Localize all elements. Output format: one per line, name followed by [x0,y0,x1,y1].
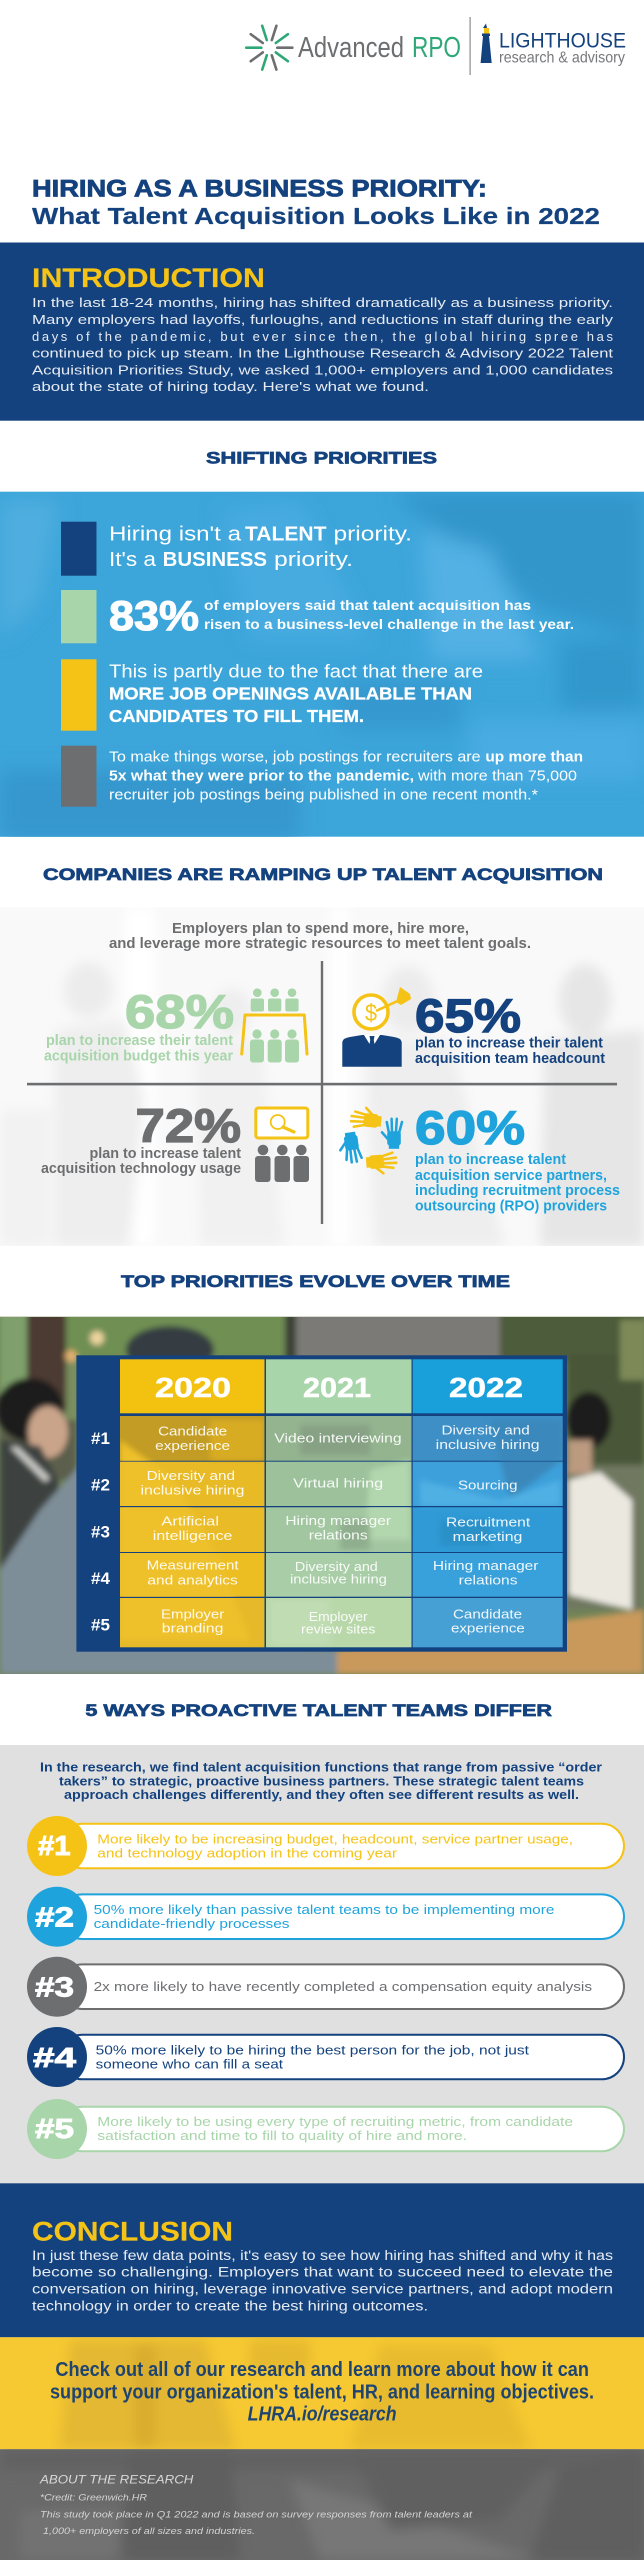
stat: 83 percent: risen to a business-level challenge in the last year. [204,616,574,632]
text: not a talent priority: Hiring isn't a [109,524,242,546]
column: 2022 cells: Hiring manager [433,1559,538,1573]
text: intro paragraph: Many employers had layoffs, furloughs, and reductions in staff during the early [32,312,614,327]
heading: conclusion: CONCLUSION [32,2217,233,2247]
item 3: #3 [35,1972,74,2002]
stat: 72 percent technology: plan to increase talent [90,1146,241,1162]
title: What Talent Acquisition Looks Like in 2022 [32,203,600,229]
panel: shifting priorities [0,492,644,840]
text: research intro: In the research, we find talent acquisition functions that range from passive “order [40,1760,602,1775]
icon: starburst [246,26,292,70]
column: 2020 cells: inclusive hiring [140,1483,244,1497]
column: 2020 cells: intelligence [153,1529,232,1543]
panel: conclusion [0,2183,644,2337]
column: 2021 cells [266,1416,412,1647]
text: not a talent priority: priority. [334,524,412,546]
text: not a talent priority [109,524,412,571]
panel: introduction [0,242,644,421]
text: more openings than candidates: CANDIDATES TO FILL THEM. [109,706,364,726]
stat: 72 percent technology [41,1099,241,1177]
heading: top priorities: TOP PRIORITIES EVOLVE OVER TIME [121,1273,510,1291]
stat: 83 percent [109,592,574,639]
column header: 2020: 2020 [155,1372,231,1403]
logo: Lighthouse: LIGHTHOUSE [499,30,626,53]
stat: 60 percent service partners: outsourcing (RPO) providers [415,1199,607,1215]
column: 2021 cells: Diversity and [295,1560,378,1574]
text: more openings than candidates [109,661,483,726]
text: recruiter job postings: 5x what they were prior to the pandemic, [109,769,414,785]
icon: lighthouse [481,24,492,63]
text: conclusion paragraph [32,2248,613,2313]
item 4: #4 [33,2042,77,2073]
column: 2021 cells: Hiring manager [285,1514,391,1528]
stat: 83 percent: of employers said that talent acquisition has [204,597,531,613]
text: call to action [50,2359,594,2426]
panel: call to action [0,2337,644,2449]
stat: 65 percent headcount: acquisition team headcount [415,1051,605,1067]
text: research notes: *Credit: Greenwich.HR [40,2492,147,2503]
text: about heading: ABOUT THE RESEARCH [39,2472,194,2486]
item 3: 2x more likely to have recently completed a compensation equity analysis [94,1979,593,1994]
heading: companies ramping up: COMPANIES ARE RAMPING UP TALENT ACQUISITION [43,866,603,884]
text: call to action: support your organization's talent, HR, and learning objectives. [50,2381,594,2403]
item 5: #5 [35,2113,74,2144]
stat: 68 percent budget: 68% [125,985,234,1038]
logo: Advanced RPO: RPO [412,32,461,64]
text: conclusion paragraph: In just these few data points, it's easy to see how hiring has shifted and why it has [32,2248,613,2263]
column: 2022 cells: marketing [453,1530,522,1544]
item 5 [27,2099,624,2159]
column: 2020 cells: experience [155,1439,230,1453]
column: 2021 cells: Employer [309,1610,368,1624]
item 4: someone who can fill a seat [96,2057,283,2072]
column: 2022 cells: relations [459,1573,518,1587]
column: 2020 cells: and analytics [147,1573,238,1587]
text: intro paragraph: Acquisition Priorities Study, we asked 1,000+ employers and 1,000 candidates [32,362,614,377]
text: call to action: Check out all of our research and learn more about how it can [55,2359,589,2381]
column: 2020 cells: Candidate [158,1425,227,1439]
text: research notes [40,2492,472,2537]
column: 2020 cells: Measurement [147,1558,239,1572]
item 5: satisfaction and time to fill to quality of hire and more. [97,2128,467,2143]
text: not a talent priority: priority. [274,549,353,571]
panel: about the research [0,2449,644,2560]
text: research notes: 1,000+ employers of all sizes and industries. [43,2526,255,2537]
column: 2021 cells: relations [309,1528,368,1542]
column: 2022 cells: Candidate [453,1607,522,1621]
column header: 2020 [120,1359,264,1413]
text: recruiter job postings: up more than [485,750,583,766]
text: subtitle: Employers plan to spend more, hire more, [172,921,469,937]
stat: 60 percent service partners: 60% [415,1101,525,1154]
item 2: candidate-friendly processes [94,1916,290,1931]
stat: 68 percent budget: acquisition budget this year [44,1049,233,1065]
column header: 2022: 2022 [449,1372,523,1403]
row numbers: #4 [91,1569,110,1588]
text: intro paragraph: about the state of hiring today. Here's what we found. [32,379,429,394]
column: 2020 cells: Diversity and [147,1469,235,1483]
logo: Lighthouse [481,24,626,67]
item 1: #1 [38,1830,71,1861]
column header: 2021: 2021 [303,1372,371,1403]
row numbers: #2 [91,1476,110,1495]
heading: 5 ways: 5 WAYS PROACTIVE TALENT TEAMS DIFFER [85,1702,552,1720]
row numbers: #5 [91,1616,110,1635]
column: 2022 cells: inclusive hiring [436,1438,540,1452]
item 1 [27,1816,624,1876]
text: not a talent priority: TALENT [245,524,326,546]
column header: 2021 [266,1359,412,1413]
text: research intro: approach challenges differently, and they often see different results as well. [64,1787,579,1802]
stat: 68 percent budget [44,985,234,1065]
row numbers [91,1429,110,1635]
text: research notes: This study took place in Q1 2022 and is based on survey responses from talent leaders at [40,2509,472,2520]
stat: 72 percent technology: 72% [136,1099,241,1152]
column header: 2022 [413,1359,563,1413]
column: 2020 cells: Artificial [161,1515,219,1529]
colour blocks [61,522,96,807]
text: not a talent priority: BUSINESS [163,549,267,571]
row numbers: #3 [91,1522,110,1541]
stat: 60 percent service partners: plan to increase talent [415,1152,566,1168]
text: conclusion paragraph: conversation on hiring, leverage innovative service partners, and adopt modern [32,2281,613,2296]
icon: target and person: $ [365,1000,377,1027]
column: 2021 cells: Virtual hiring [293,1476,383,1490]
panel: ramping up talent acquisition [0,907,644,1246]
column: 2021 cells: inclusive hiring [290,1572,387,1586]
column: 2022 cells: Sourcing [458,1478,518,1492]
stat: 60 percent service partners: including recruitment process [415,1183,620,1199]
icon: hands [338,1106,402,1174]
stat: 83 percent: 83% [109,592,199,639]
panel: top priorities photo and table [0,1310,644,1674]
text: research intro: takers” to strategic, proactive business partners. These strategic talent teams [59,1773,584,1788]
stat: 60 percent service partners: acquisition service partners, [415,1168,607,1184]
heading: introduction: INTRODUCTION [32,263,265,293]
text: recruiter job postings: recruiter job postings being published in one recent month.* [109,787,538,803]
column: 2022 cells [413,1416,563,1647]
text: recruiter job postings: with more than 75,000 [417,769,577,785]
item 1: More likely to be increasing budget, headcount, service partner usage, [97,1831,573,1846]
stat: 65 percent headcount [415,989,605,1067]
text: recruiter job postings: To make things worse, job postings for recruiters are [109,750,480,766]
logo: Lighthouse: research & advisory [499,50,625,67]
quadrant dividers [27,961,617,1224]
text: intro paragraph [32,295,614,394]
column: 2020 cells: branding [162,1622,223,1636]
panel: 5 ways [0,1745,644,2183]
text: conclusion paragraph: become so challenging. Employers that want to succeed need to elevate the [32,2265,613,2280]
logo: Advanced RPO: Advanced [298,32,404,64]
item 4: 50% more likely to be hiring the best person for the job, not just [96,2043,529,2058]
text: not a talent priority: It's a [109,549,157,571]
stat: 72 percent technology: acquisition technology usage [41,1161,241,1177]
title: HIRING AS A BUSINESS PRIORITY: [32,176,487,203]
item 1: and technology adoption in the coming year [97,1845,398,1860]
text: intro paragraph: days of the pandemic, but ever since then, the global hiring spree has [32,329,614,344]
item 3 [27,1957,624,2017]
column: 2020 cells [120,1416,264,1647]
icon: target and person [342,987,411,1067]
item 2: 50% more likely than passive talent teams to be implementing more [94,1902,554,1917]
item 2: #2 [35,1902,74,1933]
title [32,176,600,229]
text: intro paragraph: continued to pick up steam. In the Lighthouse Research & Advisory 2022 Talent [32,346,613,361]
item 2 [27,1887,624,1947]
text: intro paragraph: In the last 18-24 months, hiring has shifted dramatically as a business priority. [32,295,613,310]
icon: conference table [242,988,307,1062]
heading: shifting priorities: SHIFTING PRIORITIES [206,449,437,467]
column: 2020 cells: Employer [161,1607,224,1621]
item 4 [27,2027,624,2087]
text: more openings than candidates: MORE JOB OPENINGS AVAILABLE THAN [109,683,472,703]
stat: 65 percent headcount: plan to increase their talent [415,1036,603,1052]
item 5: More likely to be using every type of recruiting metric, from candidate [97,2114,573,2129]
icon: magnifier screen and people [255,1108,309,1182]
column: 2022 cells: experience [451,1622,525,1636]
text: subtitle [109,921,531,952]
column: 2021 cells: Video interviewing [274,1432,402,1446]
logos [246,17,626,75]
column: 2022 cells: Diversity and [442,1423,530,1437]
stat: 60 percent service partners [415,1101,620,1215]
stat: 65 percent headcount: 65% [415,989,521,1042]
row numbers: #1 [91,1429,110,1448]
data table [76,1355,567,1652]
column: 2021 cells: review sites [301,1622,375,1636]
text: research intro [40,1760,602,1802]
column: 2022 cells: Recruitment [446,1516,531,1530]
logo: Advanced RPO [246,26,461,70]
text: call to action: LHRA.io/research [248,2404,397,2426]
text: recruiter job postings [109,750,583,803]
text: conclusion paragraph: technology in order to create the best hiring outcomes. [32,2298,428,2313]
text: more openings than candidates: This is partly due to the fact that there are [109,661,483,681]
text: subtitle: and leverage more strategic resources to meet talent goals. [109,936,531,952]
stat: 68 percent budget: plan to increase their talent [46,1033,233,1049]
